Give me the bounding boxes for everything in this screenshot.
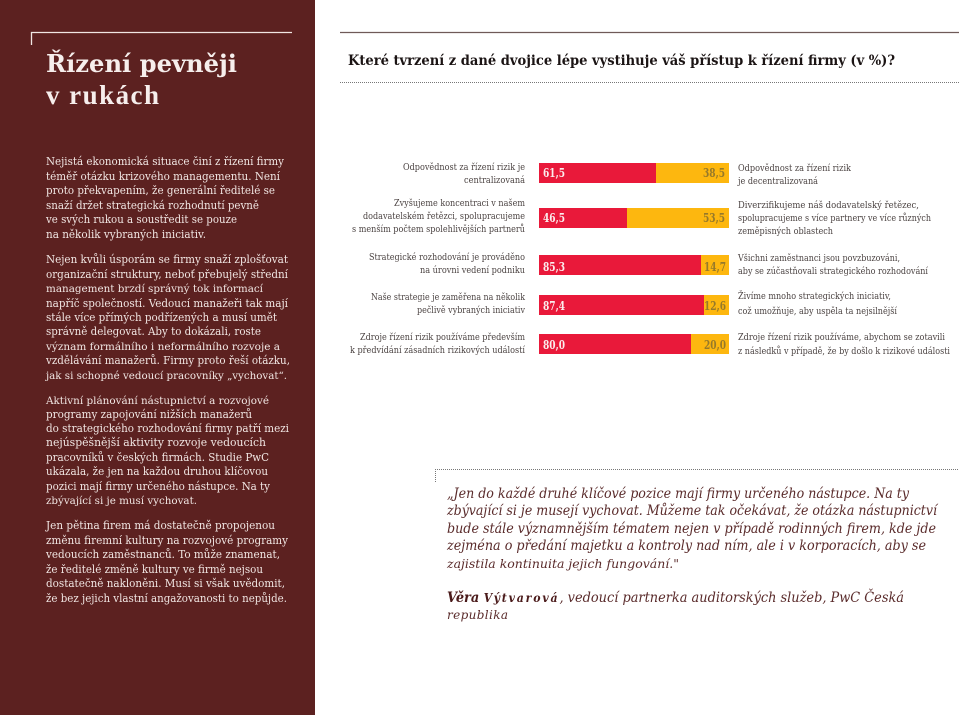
left statements: s menším počtem spolehlivějších partnerů bbox=[352, 223, 525, 235]
quote text: „Jen do každé druhé klíčové pozice mají firmy určeného nástupce. Na ty bbox=[447, 485, 910, 502]
bar row 2 bbox=[539, 208, 729, 228]
left statements: Naše strategie je zaměřena na několik bbox=[371, 292, 525, 303]
text block: intro paragraph: proto překvapením, že generální ředitelé se bbox=[46, 183, 275, 197]
text block: fourth paragraph: Jen pětina firem má dostatečně propojenou bbox=[45, 518, 275, 532]
quote attribution: republika bbox=[447, 608, 508, 622]
left statements: na úrovni vedení podniku bbox=[420, 265, 525, 276]
right statements: zeměpisných oblastech bbox=[738, 226, 833, 237]
bar row 1: 61,5 bbox=[543, 166, 565, 180]
bar row 3: 14,7 bbox=[704, 260, 726, 274]
bar row 3: 85,3 bbox=[543, 260, 565, 274]
right statements: Všichni zaměstnanci jsou povzbuzováni, bbox=[737, 253, 900, 264]
text block: intro paragraph: na několik vybraných iniciativ. bbox=[46, 227, 206, 241]
text block: third paragraph: ukázala, že jen na každou druhou klíčovou bbox=[46, 464, 268, 478]
text block: third paragraph: pozici mají firmy určeného nástupce. Na ty bbox=[46, 479, 270, 493]
text block: intro paragraph: téměř otázku krizového managementu. Není bbox=[46, 169, 280, 183]
right statements: což umožňuje, aby uspěla ta nejsilnější bbox=[738, 306, 898, 317]
right statements: spolupracujeme s více partnery ve více různých bbox=[738, 212, 931, 224]
text block: third paragraph: zbývající si je musí vychovat. bbox=[46, 494, 197, 507]
bar row 5: 80,0 bbox=[543, 338, 565, 352]
left statements: Strategické rozhodování je prováděno bbox=[369, 252, 525, 263]
text block: fourth paragraph: vedoucích zaměstnanců. To může znamenat, bbox=[45, 547, 280, 561]
text block: second paragraph bbox=[45, 252, 290, 382]
chart: diverging paired statements bbox=[350, 162, 950, 357]
bar row 4: 12,6 bbox=[704, 299, 726, 313]
bar row 1: 38,5 bbox=[703, 166, 725, 180]
bar row 5 bbox=[539, 334, 729, 354]
heading: chart question: Které tvrzení z dané dvojice lépe vystihuje váš přístup k řízení firmy (v %)? bbox=[348, 53, 895, 69]
panel: left sidebar bbox=[0, 0, 315, 715]
text block: fourth paragraph: že bez jejich vlastní angažovanosti to nepůjde. bbox=[46, 591, 287, 605]
left statements: dodavatelském řetězci, spolupracujeme bbox=[363, 211, 525, 222]
bar row 5: 20,0 bbox=[704, 338, 726, 352]
text block: second paragraph: význam formálního i neformálního rozvoje a bbox=[45, 340, 280, 353]
left statements: Odpovědnost za řízení rizik je bbox=[403, 162, 525, 173]
text block: second paragraph: vzdělávání manažerů. Firmy proto řeší otázku, bbox=[45, 353, 290, 367]
quote attribution: Věra Výtvarová, vedoucí partnerka auditorských služeb, PwC Česká bbox=[447, 587, 904, 606]
text block: third paragraph bbox=[45, 395, 289, 507]
text block: third paragraph: Aktivní plánování nástupnictví a rozvojové bbox=[45, 395, 269, 407]
text block: third paragraph: do strategického rozhodování firmy patří mezi bbox=[46, 421, 289, 435]
bar row 4: 87,4 bbox=[543, 299, 565, 313]
text block: intro paragraph: Nejistá ekonomická situace činí z řízení firmy bbox=[46, 154, 284, 168]
text block: second paragraph: stále více přímých podřízených a musí umět bbox=[46, 310, 277, 324]
bar row 2: 46,5 bbox=[543, 211, 565, 225]
text block: intro paragraph: ve svých rukou a soustředit se pouze bbox=[45, 212, 237, 226]
title: Řízení pevněji bbox=[46, 49, 237, 78]
right statements: je decentralizovaná bbox=[737, 176, 818, 187]
left statements: pečlivě vybraných iniciativ bbox=[417, 305, 526, 316]
left statements: Zdroje řízení rizik používáme především bbox=[360, 332, 525, 343]
title bbox=[46, 49, 237, 110]
bar row 2: 53,5 bbox=[703, 211, 725, 225]
left statements bbox=[350, 162, 526, 356]
callout: quote bbox=[436, 470, 959, 622]
text block: third paragraph: nejúspěšnější aktivity rozvoje vedoucích bbox=[46, 435, 266, 449]
bar row 1 bbox=[539, 163, 729, 183]
text block: intro paragraph: snaží držet strategická rozhodnutí pevně bbox=[46, 198, 259, 212]
text block: second paragraph: Nejen kvůli úsporám se firmy snaží zplošťovat bbox=[46, 252, 288, 266]
left statements: k předvídání zásadních rizikových událostí bbox=[350, 345, 526, 356]
right statements: Diverzifikujeme náš dodavatelský řetězec, bbox=[738, 200, 919, 211]
text block: fourth paragraph: že ředitelé změně kultury ve firmě nejsou bbox=[46, 562, 263, 576]
left statements: Zvyšujeme koncentraci v našem bbox=[394, 198, 525, 209]
right statements: Živíme mnoho strategických iniciativ, bbox=[738, 290, 891, 302]
text block: fourth paragraph: dostatečně nakloněni. Musí si však uvědomit, bbox=[46, 576, 285, 590]
text block: second paragraph: správně delegovat. Aby to dokázali, roste bbox=[46, 324, 261, 338]
right statements: aby se zúčastňovali strategického rozhodování bbox=[738, 266, 929, 277]
text block: fourth paragraph: změnu firemní kultury na rozvojové programy bbox=[46, 533, 288, 547]
quote attribution bbox=[447, 587, 904, 622]
text block: intro paragraph bbox=[45, 154, 284, 241]
text block: third paragraph: pracovníků v českých firmách. Studie PwC bbox=[46, 450, 269, 464]
text block: fourth paragraph bbox=[45, 518, 288, 605]
text block: second paragraph: napříč společností. Vedoucí manažeři tak mají bbox=[46, 296, 288, 310]
title: v rukách bbox=[46, 80, 159, 110]
quote text bbox=[446, 485, 939, 571]
text block: third paragraph: programy zapojování nižších manažerů bbox=[46, 407, 252, 421]
right statements: Odpovědnost za řízení rizik bbox=[738, 163, 851, 174]
bar row 4 bbox=[539, 295, 729, 315]
bar row 3 bbox=[539, 255, 729, 275]
right statements bbox=[737, 163, 950, 357]
left statements: centralizovaná bbox=[464, 175, 525, 186]
title bracket bbox=[32, 32, 292, 45]
quote text: zajistila kontinuita jejich fungování." bbox=[446, 557, 679, 571]
text block: second paragraph: organizační struktury, neboť přebujelý střední bbox=[46, 267, 288, 281]
text block: second paragraph: jak si schopné vedoucí pracovníky „vychovat“. bbox=[45, 370, 287, 382]
text block: second paragraph: management brzdí správný tok informací bbox=[46, 282, 264, 295]
